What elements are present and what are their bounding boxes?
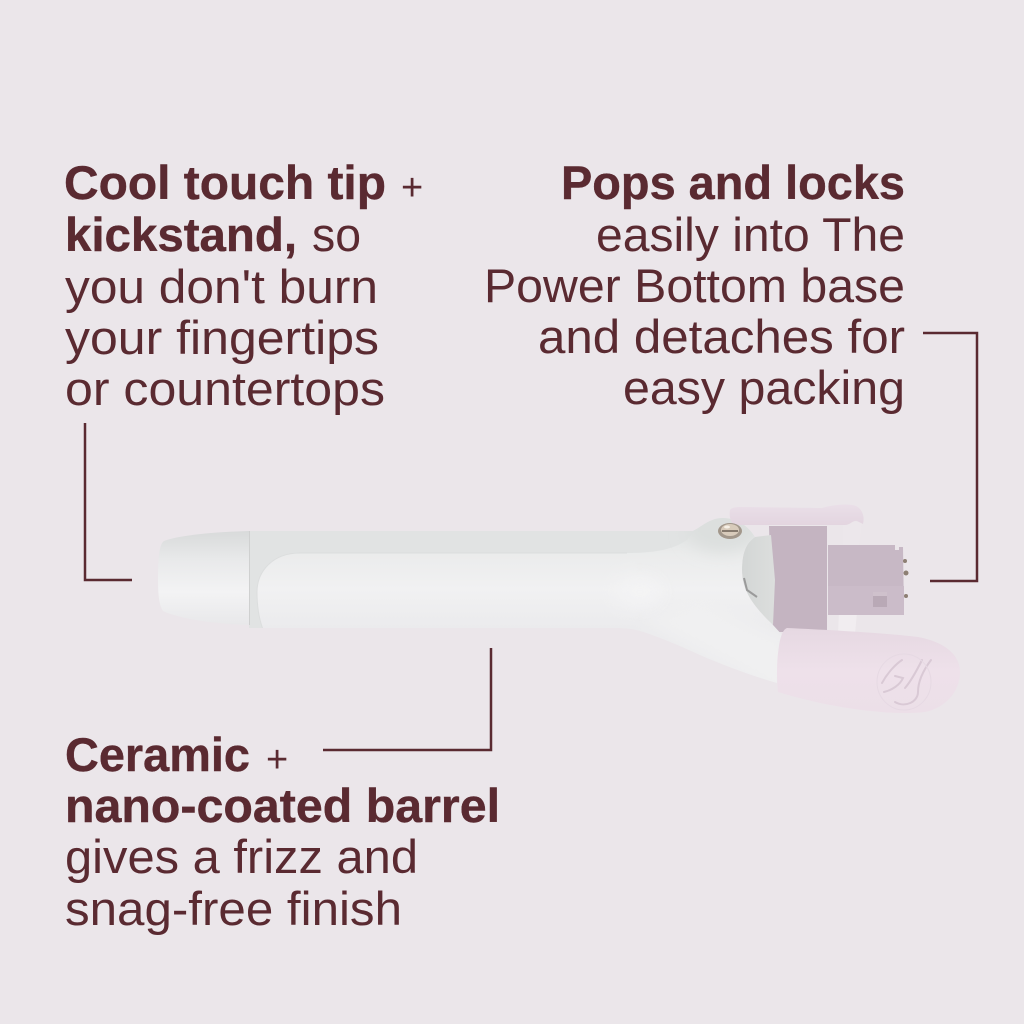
text block: ceramic barrel: + — [266, 739, 288, 781]
text block: cool touch tip: you don't burn — [65, 260, 378, 313]
top kickstand arm — [730, 505, 864, 525]
barrel seam — [248, 531, 250, 625]
barrel inset panel edge — [257, 553, 627, 632]
text block: pops and locks: Power Bottom base — [484, 259, 905, 312]
callout line: cool tip — [85, 423, 132, 580]
barrel tip — [158, 531, 249, 625]
text block: pops and locks: Pops and locks — [561, 156, 905, 209]
text block: pops and locks: and detaches for — [538, 310, 905, 363]
curling iron — [158, 505, 960, 713]
connector tab — [873, 592, 887, 607]
text block: pops and locks: easily into The — [596, 208, 905, 261]
text block: ceramic barrel: nano-coated barrel — [65, 779, 500, 832]
text block: cool touch tip: + — [401, 167, 423, 209]
text block: cool touch tip: or countertops — [65, 362, 385, 415]
text block: cool touch tip: kickstand, — [65, 208, 297, 261]
barrel and handle — [249, 518, 780, 682]
callout line: barrel — [323, 648, 491, 750]
lower support leg — [838, 612, 857, 634]
connector post — [828, 545, 904, 615]
text block: cool touch tip: Cool touch tip — [64, 156, 386, 209]
barrel top band — [249, 550, 659, 628]
text block: pops and locks — [484, 156, 905, 414]
handle lower tone — [640, 600, 790, 700]
text block: cool touch tip: your fingertips — [65, 311, 379, 364]
cap logo — [877, 654, 931, 710]
text block: ceramic barrel: gives a frizz and — [65, 830, 418, 883]
text block: ceramic barrel: Ceramic — [65, 728, 250, 781]
handle highlight — [616, 574, 664, 610]
connector pins — [903, 559, 908, 598]
screw — [718, 523, 742, 539]
text block: ceramic barrel: snag-free finish — [65, 882, 402, 935]
mauve collar — [769, 526, 827, 632]
upper support leg — [843, 522, 862, 548]
pink cap — [777, 628, 960, 713]
text block: cool touch tip — [64, 156, 423, 415]
handle shade near screw — [704, 534, 740, 549]
text block: cool touch tip: so — [312, 208, 361, 261]
callout line: base connector — [923, 333, 977, 581]
text block: ceramic barrel — [65, 728, 500, 935]
handle recess — [742, 535, 775, 625]
wire — [744, 578, 757, 597]
text block: pops and locks: easy packing — [623, 361, 905, 414]
